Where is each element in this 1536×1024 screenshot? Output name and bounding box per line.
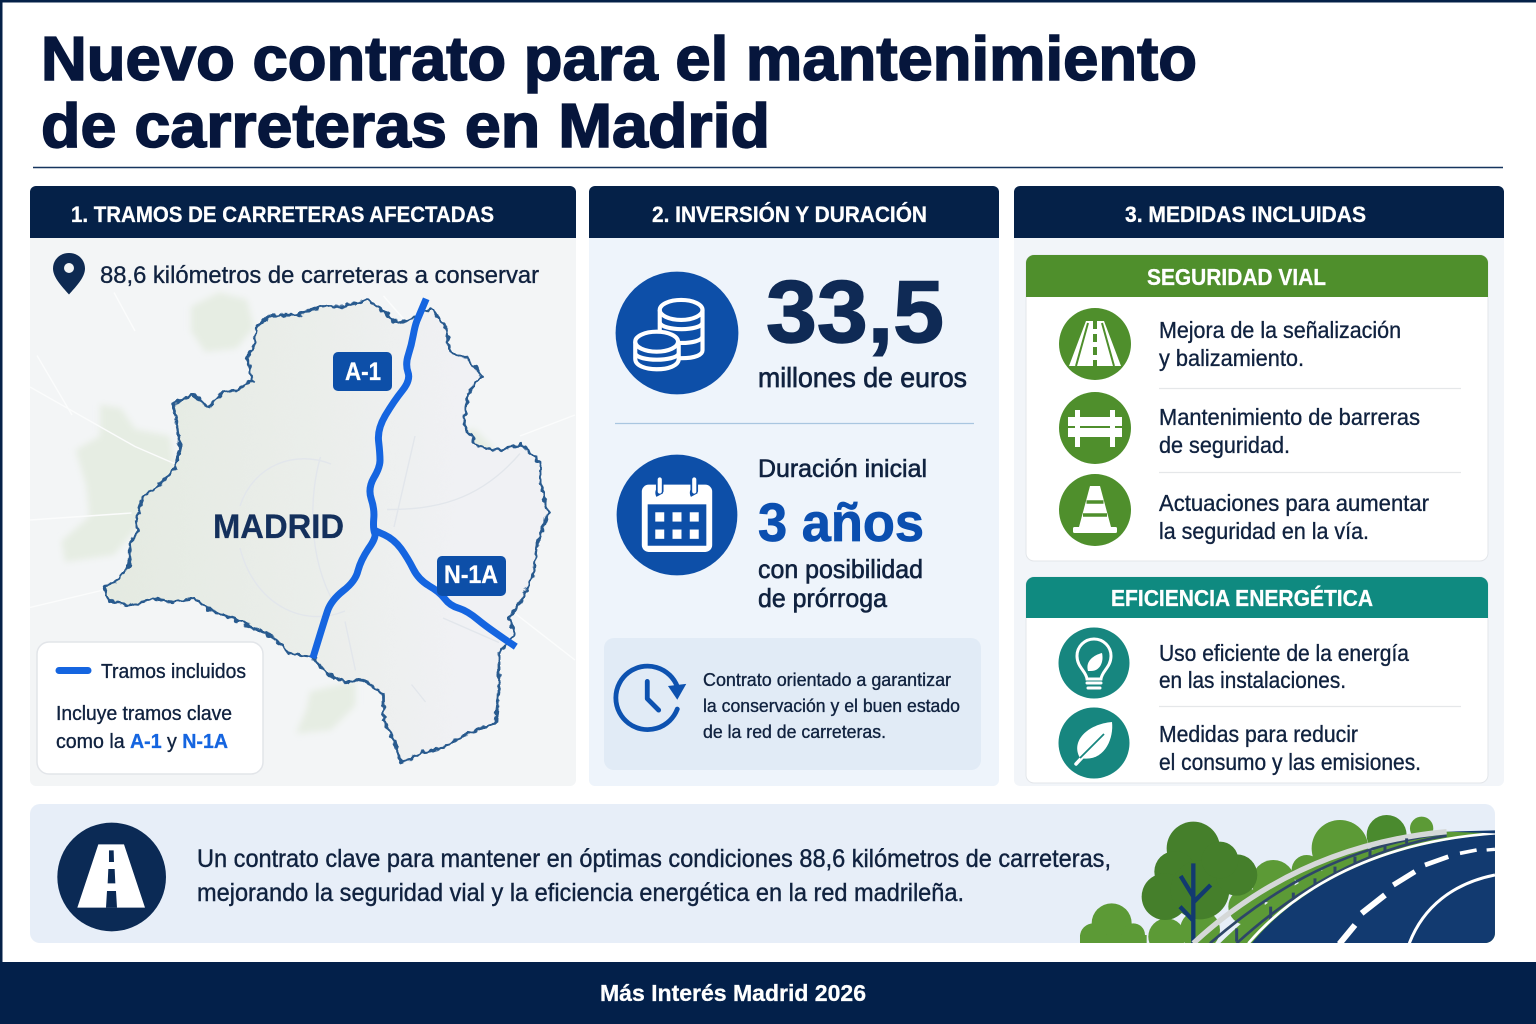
card heading: eficiencia energética: EFICIENCIA ENERGÉTICA	[1111, 584, 1373, 611]
badge: A-1: A-1	[345, 358, 381, 386]
illustration: trees and road	[1080, 815, 1495, 955]
text: actuaciones: Actuaciones para aumentar	[1159, 490, 1429, 516]
label: MADRID: MADRID	[213, 508, 344, 546]
icon: leaf	[1058, 708, 1130, 778]
title	[41, 25, 1197, 161]
text: energía: Uso eficiente de la energía	[1159, 640, 1409, 666]
duration text: Duración inicial	[758, 455, 927, 483]
text: señalización: Mejora de la señalización	[1159, 317, 1401, 343]
panel 2 heading: 2. INVERSIÓN Y DURACIÓN	[652, 202, 927, 227]
text: millones de euros: millones de euros	[758, 362, 967, 393]
icon: coins	[616, 272, 738, 394]
legend: Tramos incluidos	[101, 661, 246, 683]
icon: traffic cone	[1059, 474, 1131, 546]
title: de carreteras en Madrid	[41, 92, 770, 161]
badge: A-1	[333, 352, 392, 391]
icon: clock with arrow	[616, 666, 686, 730]
duration text: con posibilidad	[758, 554, 923, 584]
icon: location pin	[53, 253, 85, 294]
map of Madrid	[62, 293, 551, 764]
panel: tramos de carreteras	[30, 186, 576, 786]
callout: de la red de carreteras.	[703, 721, 886, 742]
text: actuaciones	[1159, 490, 1429, 544]
summary text: Un contrato clave para mantener en óptimas condiciones 88,6 kilómetros de carreteras,	[197, 845, 1111, 873]
panel 3 heading: 3. MEDIDAS INCLUIDAS	[1125, 202, 1366, 227]
figure: 33,5: 33,5	[766, 262, 944, 361]
duration text	[758, 455, 927, 613]
card: eficiencia energética	[1026, 577, 1488, 783]
panel 1 map background	[30, 238, 576, 786]
panel: medidas incluidas	[1014, 186, 1504, 786]
duration text: de prórroga	[758, 583, 888, 613]
title: Nuevo contrato para el mantenimiento	[41, 25, 1197, 94]
legend: Incluye tramos clave	[56, 703, 232, 725]
callout: Contrato orientado a garantizar	[703, 669, 951, 690]
card heading: seguridad vial: SEGURIDAD VIAL	[1147, 264, 1326, 290]
footer: Más Interés Madrid 2026	[600, 980, 866, 1006]
text: señalización: y balizamiento.	[1159, 345, 1304, 371]
icon: calendar	[617, 455, 737, 575]
text: barreras: Mantenimiento de barreras	[1159, 404, 1420, 430]
badge: N-1A: N-1A	[444, 561, 498, 589]
distance label: 88,6 kilómetros de carreteras a conservar	[100, 262, 539, 289]
summary text: mejorando la seguridad vial y la eficiencia energética en la red madrileña.	[197, 879, 964, 907]
card: seguridad vial	[1026, 255, 1488, 561]
icon: barrier	[1059, 392, 1131, 464]
text: emisiones: el consumo y las emisiones.	[1159, 749, 1421, 775]
text: emisiones	[1159, 721, 1421, 775]
callout: la conservación y el buen estado	[703, 695, 960, 716]
panel: inversión y duración	[589, 186, 999, 786]
icon: road badge	[57, 823, 166, 931]
legend	[37, 642, 263, 774]
road A-1	[313, 299, 426, 658]
text: barreras: de seguridad.	[1159, 432, 1290, 458]
text: señalización	[1159, 317, 1401, 371]
callout	[604, 638, 981, 770]
footer	[0, 962, 1536, 1024]
summary banner	[30, 804, 1495, 955]
panel 2 heading	[589, 186, 999, 238]
panel 3 heading	[1014, 186, 1504, 238]
icon: light bulb with leaf	[1058, 628, 1130, 698]
card heading: seguridad vial	[1026, 255, 1488, 297]
panel 1 heading	[30, 186, 576, 238]
text: emisiones: Medidas para reducir	[1159, 721, 1358, 747]
duration text: 3 años	[758, 493, 924, 553]
legend: como la A-1 y N-1A	[56, 731, 228, 753]
card heading: eficiencia energética	[1026, 577, 1488, 618]
road N-1A	[375, 530, 516, 647]
text: energía	[1159, 640, 1409, 693]
region outline	[104, 300, 548, 763]
text: barreras	[1159, 404, 1420, 458]
summary text	[197, 845, 1111, 907]
icon: road	[1059, 308, 1131, 380]
text: actuaciones: la seguridad en la vía.	[1159, 518, 1369, 544]
panel 1 heading: 1. TRAMOS DE CARRETERAS AFECTADAS	[71, 202, 494, 227]
badge: N-1A	[437, 556, 506, 596]
text: energía: en las instalaciones.	[1159, 667, 1346, 693]
